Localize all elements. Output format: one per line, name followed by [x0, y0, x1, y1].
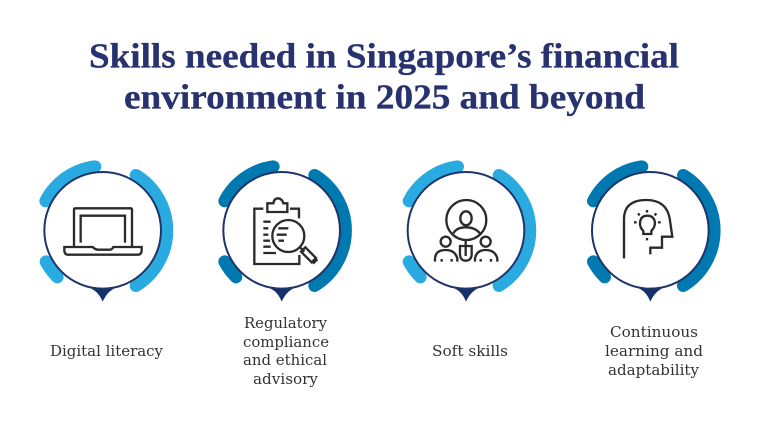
icon: clipboard with magnifier: [254, 198, 317, 264]
panel: soft skills: [408, 167, 530, 302]
label: continuous learning and adaptability: [605, 323, 703, 379]
label: continuous learning and adaptability: learning and: [605, 342, 703, 360]
label: regulatory compliance and ethical advisory: Regulatory: [244, 314, 328, 332]
icon: people group: [435, 200, 497, 262]
label: continuous learning and adaptability: adaptability: [608, 361, 700, 379]
title: [89, 36, 679, 116]
title: environment in 2025 and beyond: [124, 78, 646, 116]
label: continuous learning and adaptability: Continuous: [610, 323, 698, 341]
panel: regulatory compliance: [223, 167, 346, 302]
panel: continuous learning: [592, 167, 714, 302]
icon: laptop: [64, 208, 142, 255]
label: regulatory compliance and ethical advisory: advisory: [253, 370, 319, 388]
label: digital literacy: Digital literacy: [50, 342, 164, 360]
panel: digital literacy: [44, 167, 167, 302]
icon: head with lightbulb: [624, 200, 672, 258]
label: regulatory compliance and ethical advisory: compliance: [243, 333, 329, 351]
title: Skills needed in Singapore’s financial: [89, 36, 679, 76]
label: regulatory compliance and ethical advisory: and ethical: [243, 351, 327, 369]
label: regulatory compliance and ethical advisory: [243, 314, 329, 388]
label: soft skills: Soft skills: [432, 342, 508, 360]
